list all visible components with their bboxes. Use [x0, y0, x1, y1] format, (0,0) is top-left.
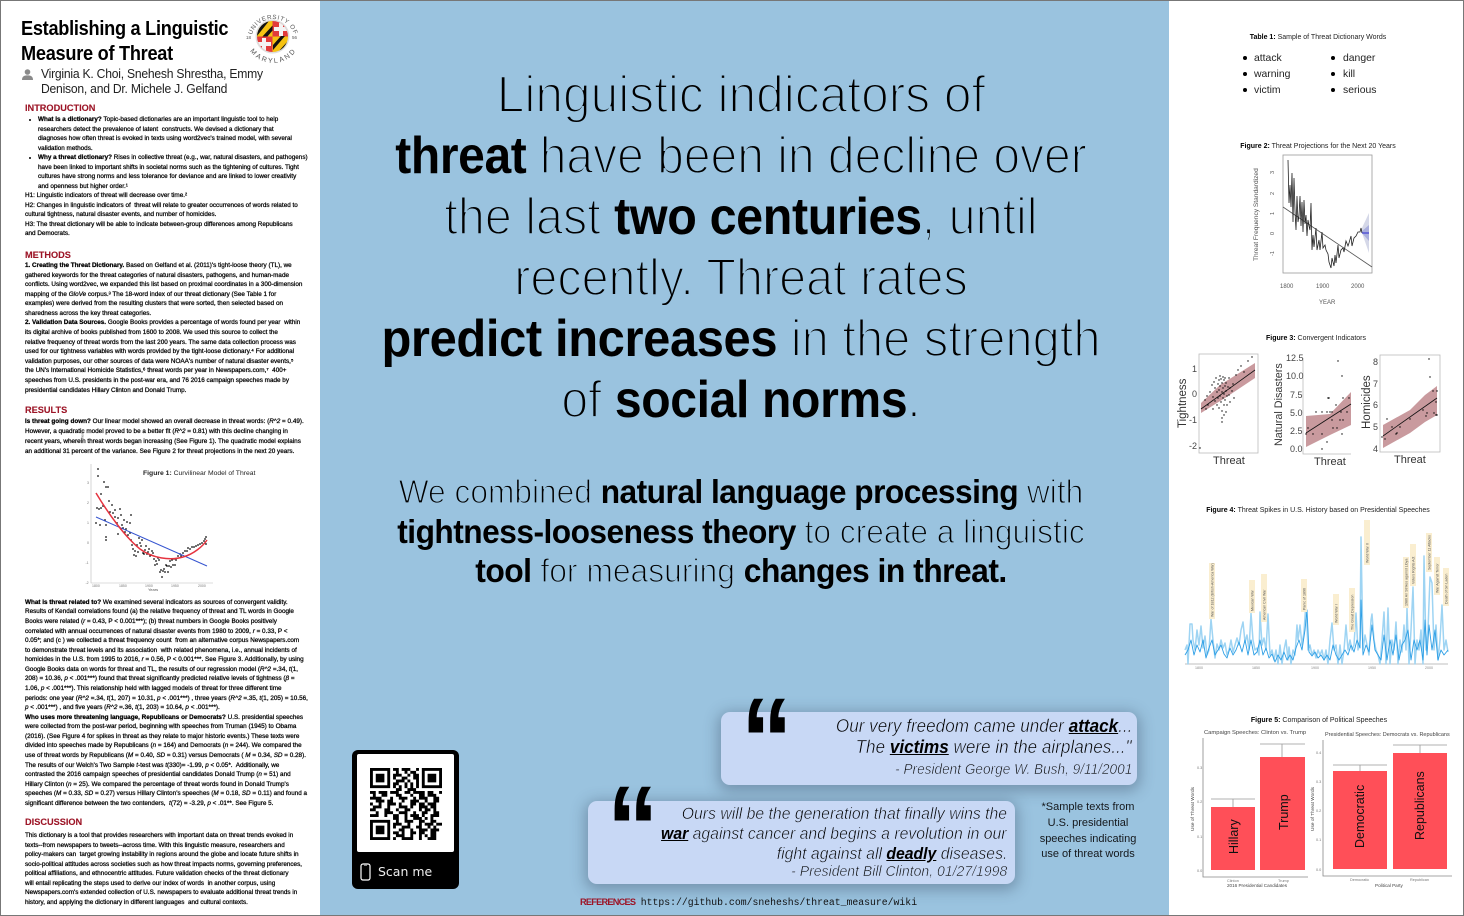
text: methods: examples) were derived from the resulting clusters that were sorted, then selected based on: [25, 300, 283, 307]
chart: figure 1 curvilinear model of threat: 2000: [198, 584, 206, 588]
tightness panel: Threat: [1213, 455, 1245, 467]
homicides panel: 5: [1373, 422, 1378, 432]
tightness panel: -1: [1189, 415, 1197, 425]
chart: figure 4 threat spikes: World War II: [1366, 543, 1370, 563]
text: results part one: Is threat going down? Our linear model showed an overall decrease in threat words: (R^2 = 0.49).: [25, 418, 304, 425]
text: results part two: Who uses more threatening language, Republicans or Democrats? U.S. presidential speeches: [25, 714, 303, 721]
text: hypotheses: [25, 192, 298, 237]
text: introduction bullets: What is a dictionary? Topic-based dictionaries are an important linguistic tool to help: [38, 116, 278, 123]
table 1 word list: [1243, 53, 1376, 96]
QR white panel: [357, 754, 454, 852]
text: results part two: Results of Kendall correlations found (a) the relative frequency of threat and TL words in Google: [25, 608, 294, 615]
icon: bullet one: [29, 118, 31, 120]
text: results part two: divided into speeches made by Republicans (n = 164) and Democrats (n = 244). We compared the: [25, 742, 302, 749]
homicides panel: 6: [1373, 400, 1378, 410]
text: discussion: Newspapers.com's extended collection of U.S. newspapers to evaluate additional threat trends in: [25, 889, 297, 896]
text: methods: its digital archive of books published from 1600 to 2008. We used this source to collect the: [25, 329, 278, 336]
text: discussion: socio-political attitudes across societies such as how threat impacts norms, governing preferences,: [25, 861, 302, 868]
text: results part two: The results of our Welch's Two Sample t-test was t(330)= -1.99, p < 0.05*. Additionally, we: [25, 762, 279, 769]
panel: right column figures: 0.3: [1316, 780, 1321, 784]
chart: figure 2 threat projections: 0: [1270, 232, 1276, 235]
bullet: [1243, 88, 1247, 92]
text: results part two: to demonstrate threat levels and its association with related phenomena, i.e., annual incidents of: [25, 647, 297, 654]
logo: University of Maryland seal: [246, 14, 298, 63]
text: results part two: homicides in the U.S. from 1995 to 2016, r = 0.56, P < 0.001***. See Figure 3. Additionally, by using: [25, 656, 304, 663]
label: scan me: Scan me: [378, 864, 432, 879]
chart: figure 2 threat projections: 2: [1270, 192, 1276, 195]
chart: figure 3 convergent indicators: [1177, 353, 1440, 468]
bullet: [1243, 72, 1247, 76]
natural disasters panel: 0.0: [1290, 444, 1303, 454]
chart: figure 5 presidential speeches: Political Party: [1375, 883, 1404, 888]
text: methods: presidential candidates Hillary Clinton and Donald Trump.: [25, 387, 186, 394]
word: serious: serious: [1343, 85, 1376, 96]
text: hypotheses: cultural tightness, natural disaster events, and number of homicides.: [25, 211, 216, 218]
chart: figure 5 campaign speeches: Clinton: [1227, 879, 1239, 883]
tightness panel: Tightness: [1177, 378, 1189, 428]
chart: figure 1 curvilinear model of threat: 2: [87, 501, 89, 505]
chart: figure 2 threat projections: YEAR: [1319, 300, 1336, 306]
subheading: method summary: [397, 474, 1085, 590]
tightness panel: 0: [1192, 389, 1197, 399]
headline line 2: threat have been in decline over: [395, 127, 1087, 185]
chart: figure 1 curvilinear model of threat: -2: [86, 581, 89, 585]
chart: figure 4 threat spikes: Voters Rights Act: [1412, 557, 1416, 584]
panel: right column figures: Use of Threat Words: [1310, 786, 1316, 831]
chart: figure 5 campaign speeches: Use of Threat Words: [1190, 786, 1196, 831]
chart: figure 1 curvilinear model of threat: 1950: [171, 584, 179, 588]
figure 3 heading: Figure 3: Convergent Indicators: [1266, 335, 1366, 342]
subheading line 3: tool for measuring changes in threat.: [475, 553, 1007, 590]
text: results part two: were collected from the post-war period, beginning with speeches from Truman (1945) to Obama: [25, 723, 296, 730]
text: discussion: history, and applying the dictionary in different languages and cultural contexts.: [25, 899, 248, 906]
quote line 1: Ours will be the generation that finally wins the: [682, 804, 1007, 823]
subheading line 2: tightness-looseness theory to create a linguistic: [397, 514, 1085, 551]
heading: introduction: INTRODUCTION: [25, 103, 95, 113]
headline: main takeaway: [381, 66, 1101, 429]
text: results part two: periods: one year (R^2 =.34, t(1, 207) = 10.31, p < .001***) , three years (R^2 =.35, t(1, 205) = 10.56,: [25, 695, 308, 702]
homicides panel: 7: [1373, 379, 1378, 389]
chart: figure 5 presidential speeches: Democratic: [1353, 785, 1367, 848]
text: methods: sharedness across the key threat categories.: [25, 310, 151, 317]
QR code: [370, 768, 442, 840]
quote line 1: Our very freedom came under attack...: [836, 716, 1132, 736]
text: methods: mapping of the GloVe corpus.³ The 18-word index of our threat dictionary (See Table 1 for: [25, 291, 276, 298]
text: methods: gathered keywords for the threat categories of natural disasters, pathogens, and human-made: [25, 272, 289, 279]
chart: figure 4 threat spikes: War Against Terror: [1436, 563, 1440, 593]
panel: right column figures: 0.2: [1316, 809, 1321, 813]
panel: right column figures: 0.0: [1316, 868, 1321, 872]
text: discussion: political affiliations, and ethnocentric attitudes. Future validation checks of the threat dictionary: [25, 870, 289, 877]
chart: figure 1 curvilinear model of threat: 1900: [145, 584, 153, 588]
panel: right column figures: 0.4: [1316, 751, 1321, 755]
heading: discussion: DISCUSSION: [25, 817, 82, 827]
chart: figure 1 curvilinear model of threat: Figure 1: Curvilinear Model of Threat: [143, 470, 256, 477]
quote: George W. Bush: [711, 673, 1147, 807]
homicides panel: 8: [1373, 357, 1378, 367]
text: results part two: significant difference between the two contenders, t(72) = -3.29, p < .01**. See Figure 5.: [25, 800, 273, 807]
chart: figure 1 curvilinear model of threat: Years: [148, 587, 158, 592]
chart: figure 4 threat spikes: American Civil War: [1262, 589, 1266, 620]
text: results part two: 0.05*; and (c ) we collected a threat frequency count from an alternative corpus Newspapers.com: [25, 637, 299, 644]
chart: figure 2 threat projections: [1253, 154, 1372, 306]
icon: person: [22, 69, 33, 80]
table 1 heading: Table 1: Sample of Threat Dictionary Words: [1250, 34, 1386, 41]
natural disasters panel: Natural Disasters: [1273, 363, 1285, 446]
text: results part one: [25, 418, 304, 455]
text: introduction bullets: researchers detect the prevalence of latent constructs. We devised a dictionary that: [38, 126, 274, 133]
authors: Denison, and Dr. Michele J. Gelfand: [41, 81, 227, 96]
note: sample texts: *Sample texts from: [1042, 801, 1134, 813]
text: hypotheses: H3: The threat dictionary will be able to indicate between-group differences among Republicans: [25, 221, 293, 228]
note: sample texts: use of threat words: [1041, 848, 1135, 860]
natural disasters panel: 12.5: [1286, 353, 1304, 363]
chart: figure 5 presidential speeches: [1319, 0, 1464, 895]
chart: figure 5 campaign speeches: Hillary: [1227, 819, 1241, 854]
text: discussion: will entail replicating the steps used to derive our index of words in another corpus, using: [25, 880, 275, 887]
icon: phone: [360, 863, 371, 881]
logo: University of Maryland seal: UNIVERSITY OF: [248, 14, 298, 34]
homicides panel: 4: [1373, 444, 1378, 454]
quote mark: “: [741, 673, 793, 807]
quote mark: “: [607, 761, 659, 895]
text: results part two: [24, 599, 308, 807]
note: sample texts: U.S. presidential: [1048, 817, 1128, 829]
chart: figure 4 threat spikes: The Great Depression: [1350, 595, 1354, 630]
text: results part two: correlated with annual occurrences of natural disaster events from 1980 to 2009, r = 0.33, P <: [25, 628, 288, 635]
text: results part two: 1.06, p < .001***). This relationship held with lagged models of threat for three different time: [25, 685, 282, 692]
chart: figure 1 curvilinear model of threat: 0: [87, 541, 89, 545]
chart: figure 5 campaign speeches: 0.2: [1197, 800, 1202, 804]
figure 2 heading: Figure 2: Threat Projections for the Next 20 Years: [1240, 143, 1396, 150]
panel: right column figures: 0.1: [1316, 838, 1321, 842]
text: methods: speeches from U.S. presidents in the post-war era, and 76 2016 campaign speeches made by: [25, 377, 289, 384]
chart: figure 1 curvilinear model of threat: -1: [86, 561, 89, 565]
text: introduction bullets: and openness but higher order.¹: [38, 183, 128, 190]
chart: figure 5 presidential speeches: Presidential Speeches: Democrats vs. Republicans: [1325, 732, 1450, 738]
chart: figure 5 campaign speeches: 0.0: [1197, 869, 1202, 873]
chart: figure 4 threat spikes: Panic of 1896: [1302, 588, 1306, 610]
word: victim: victim: [1254, 85, 1281, 96]
word: danger: danger: [1343, 53, 1375, 64]
text: methods: the UN's International Homicide Statistics,⁶ threat words per year in Newspapers.com,⁷ 400+: [25, 367, 286, 374]
subheading line 1: We combined natural language processing with: [399, 474, 1083, 511]
title: Measure of Threat: [21, 42, 173, 64]
chart: figure 5 campaign speeches: Trump: [1277, 794, 1291, 830]
chart: figure 5 presidential speeches: Democratic: [1350, 878, 1369, 882]
chart: figure 1 curvilinear model of threat: 1800: [92, 584, 100, 588]
text: discussion: This dictionary is a tool that provides researchers with important data on threat trends evoked in: [25, 832, 293, 839]
text: discussion: texts--from newspapers to tweets--across time. With this linguistic measure, researchers and: [25, 842, 285, 849]
text: results part two: (2016). (See Figure 4 for spikes in threat as they relate to major historic events.) These texts were: [25, 733, 299, 740]
note: sample texts: [1040, 801, 1136, 860]
text: introduction bullets: diagnoses how often threat is evoked in texts using word2vec's trained model, with several: [38, 135, 292, 142]
chart: figure 2 threat projections: 3: [1270, 171, 1276, 174]
text: results part two: speeches (M = 0.33, SD = 0.27) versus Hillary Clinton's speeches (M = 0.18, SD = 0.11) and found a: [25, 790, 307, 797]
chart: figure 2 threat projections: Threat Frequency Standardized: [1253, 168, 1260, 261]
text: results part one: an additional 31 percent of the variance. See Figure 2 for threat projections in the next 20 years.: [25, 448, 294, 455]
text: discussion: [24, 832, 302, 906]
text: methods: 1. Creating the Threat Dictionary. Based on Gelfand et al. (2011)'s tight-loose theory (TL), we: [25, 262, 292, 269]
chart: figure 1 curvilinear model of threat: 1850: [119, 584, 127, 588]
chart: figure 4 threat spikes: 2000: [1425, 666, 1433, 670]
figure 4 heading: Figure 4: Threat Spikes in U.S. History based on Presidential Speeches: [1206, 507, 1430, 514]
chart: figure 4 threat spikes: 1850: [1252, 666, 1260, 670]
heading: results: RESULTS: [25, 405, 67, 415]
text: methods: relative frequency of threat words from the last 200 years. The same data collection process was: [25, 339, 296, 346]
bullet: [1331, 56, 1335, 60]
panel: left column: [21, 14, 308, 906]
bullet: [1331, 88, 1335, 92]
bullet: [1243, 56, 1247, 60]
headline line 1: Linguistic indicators of: [497, 66, 985, 124]
text: results part two: 208) = 10.36, p < .001***) found that threat significantly predicted relative levels of tightness (β =: [25, 675, 295, 682]
chart: figure 4 threat spikes: September 11 Attacks: [1428, 535, 1432, 570]
chart: figure 5 campaign speeches: 2016 Presidential Candidates: [1227, 883, 1288, 888]
authors: [41, 66, 263, 96]
text: introduction bullets: cultures have strong norms and less tolerance for deviance and are linked to lower creativity: [38, 173, 296, 180]
natural disasters panel: 2.5: [1290, 426, 1303, 436]
tightness panel: -2: [1189, 441, 1197, 451]
chart: figure 4 threat spikes: Mexican War: [1250, 589, 1254, 611]
chart: figure 5 campaign speeches: 0.1: [1197, 835, 1202, 839]
text: hypotheses: H1: Linguistic indicators of threat will decrease over time.²: [25, 192, 187, 199]
chart: figure 2 threat projections: 1800: [1280, 284, 1294, 290]
headline line 5: predict increases in the strength: [381, 310, 1101, 368]
heading: methods: METHODS: [25, 250, 71, 260]
figure 5 heading: Figure 5: Comparison of Political Speeches: [1251, 717, 1387, 724]
quote line 2: war against cancer and begins a revolution in our: [661, 824, 1007, 843]
chart: figure 5 presidential speeches: Republicans: [1413, 771, 1427, 840]
chart: figure 1 curvilinear model of threat: 1: [87, 521, 89, 525]
text: results part two: contrasted the 2016 campaign speeches of presidential candidates Donald Trump (n = 51) and: [25, 771, 291, 778]
logo: University of Maryland seal: 56: [292, 35, 298, 40]
bullet: [1331, 72, 1335, 76]
quote attribution: - President Bill Clinton, 01/27/1998: [791, 864, 1007, 880]
panel: right column figures: [1177, 34, 1452, 888]
headline line 3: the last two centuries, until: [444, 188, 1038, 246]
chart: figure 4 threat spikes: Death of bin Laden: [1444, 574, 1448, 604]
series: [1185, 537, 1448, 664]
QR code card: [352, 750, 459, 889]
quote box: [721, 712, 1137, 785]
note: sample texts: speeches indicating: [1040, 833, 1136, 845]
text: discussion: policy-makers can target growing instability in regions around the globe and locate future shifts in: [25, 851, 299, 858]
chart: figure 1 curvilinear model of threat: 3: [87, 481, 89, 485]
chart: figure 5 campaign speeches: Trump: [1278, 879, 1289, 883]
quote: Bill Clinton: [578, 761, 1025, 897]
headline line 6: of social norms.: [561, 371, 921, 429]
homicides panel: Homicides: [1361, 375, 1373, 429]
text: introduction bullets: [38, 116, 308, 190]
authors: Virginia K. Choi, Snehesh Shrestha, Emmy: [41, 66, 263, 81]
text: results part one: However, a quadratic model proved to be a better fit (R^2 = 0.81) with this decline changing in: [25, 428, 288, 435]
natural disasters panel: Threat: [1314, 456, 1346, 468]
chart: figure 2 threat projections: 1900: [1316, 284, 1330, 290]
chart: figure 4 threat spikes: 1950: [1368, 666, 1376, 670]
text: methods: validation purposes, our other sources of data were NOAA's number of natural disaster events,⁵: [25, 358, 294, 365]
logo: University of Maryland seal: MARYLAND: [250, 48, 294, 63]
chart: figure 5 presidential speeches: Republican: [1410, 878, 1429, 882]
natural disasters panel: 10.0: [1286, 371, 1304, 381]
headline line 4: recently. Threat rates: [514, 249, 968, 307]
panel: left column: Threat: [80, 431, 84, 443]
chart: figure 4 threat spikes: World War I: [1334, 604, 1338, 623]
chart: figure 2 threat projections: 2000: [1351, 284, 1365, 290]
chart: figure 4 threat spikes: 1800: [1195, 666, 1203, 670]
word: attack: attack: [1254, 53, 1282, 64]
references: REFERENCES https://github.com/sneheshs/threat_measure/wiki: [580, 897, 917, 908]
text: results part two: What is threat related to? We examined several indicators as sources of convergent validity.: [25, 599, 288, 606]
chart: figure 4 threat spikes: 1900: [1311, 666, 1319, 670]
quote line 3: fight against all deadly diseases.: [776, 844, 1007, 863]
chart: figure 2 threat projections: -1: [1270, 251, 1276, 256]
chart: figure 5 campaign speeches: [1190, 730, 1308, 888]
text: results part two: Google Books data on words for threat and TL, the results of our regression model (R^2 =.34, t(1,: [25, 666, 298, 673]
word: warning: warning: [1254, 69, 1290, 80]
text: methods: conflicts. Using word2vec, we expanded this list based on proximal coordinates in a 300-dimension: [25, 281, 302, 288]
tightness panel: 1: [1192, 364, 1197, 374]
logo: University of Maryland seal: 18: [246, 35, 252, 40]
text: results part two: use of threat words by Republicans (M = 0.40, SD = 0.31) versus Democrats ( M = 0.34, SD = 0.28).: [25, 752, 306, 759]
natural disasters panel: 7.5: [1290, 390, 1303, 400]
annotation flags: [1209, 520, 1449, 632]
chart: figure 4 threat spikes: [1184, 520, 1449, 670]
natural disasters panel: [1273, 353, 1351, 468]
homicides panel: Threat: [1394, 454, 1426, 466]
chart: figure 4 threat spikes: War of 1812 (Brtish-America War): [1210, 563, 1214, 617]
text: methods: 2. Validation Data Sources. Google Books provides a percentage of words found per year within: [25, 319, 300, 326]
text: methods: [24, 262, 302, 394]
title: Establishing a Linguistic: [21, 18, 228, 40]
icon: bullet two: [29, 156, 31, 158]
text: introduction bullets: validation methods.: [38, 145, 93, 152]
text: results part two: Books were related (r = 0.43, P < 0.001***); (b) threat numbers in Google Books positively: [25, 618, 277, 625]
natural disasters panel: 5.0: [1290, 408, 1303, 418]
word: kill: kill: [1343, 69, 1355, 80]
text: introduction bullets: Why a threat dictionary? Rises in collective threat (e.g., war, natural disasters, and pathogens): [38, 154, 308, 161]
chart: figure 5 campaign speeches: 0.3: [1197, 766, 1202, 770]
quote box: [588, 801, 1015, 884]
chart: figure 2 threat projections: 1: [1270, 212, 1276, 215]
quote attribution: - President George W. Bush, 9/11/2001: [895, 762, 1132, 778]
title: [21, 18, 228, 64]
chart: figure 1 curvilinear model of threat: [80, 431, 256, 592]
panel: centre blue background: [320, 0, 1169, 916]
tightness panel: [1177, 354, 1258, 467]
text: introduction bullets: have been linked to important shifts in societal norms such as the tightening of cultures. Tight: [38, 164, 299, 171]
text: methods: used for our tightness variables with words provided by the tight-loose dictionary.⁴ For additional: [25, 348, 294, 355]
chart: figure 4 threat spikes: 1986 Air Strikes against Libya: [1404, 559, 1408, 606]
text: hypotheses: H2: Changes in linguistic indicators of threat will relate to greater occurrences of words related to: [25, 202, 298, 209]
chart: figure 5 campaign speeches: Campaign Speeches: Clinton vs. Trump: [1204, 730, 1306, 736]
text: hypotheses: and Democrats.: [25, 230, 70, 237]
text: results part two: p < .001***) , and five years (R^2 =.36, t(1, 203) = 10.64, p < .001***).: [25, 704, 220, 711]
homicides panel: [1361, 355, 1440, 466]
text: results part one: recent years, wherein threat words began increasing (See Figure 1). The quadratic model explains: [25, 438, 301, 445]
quote line 2: The victims were in the airplanes...": [856, 737, 1132, 757]
text: results part two: Hillary Clinton (n = 25). We compared the percentage of threat words found in Donald Trump's: [25, 781, 289, 788]
